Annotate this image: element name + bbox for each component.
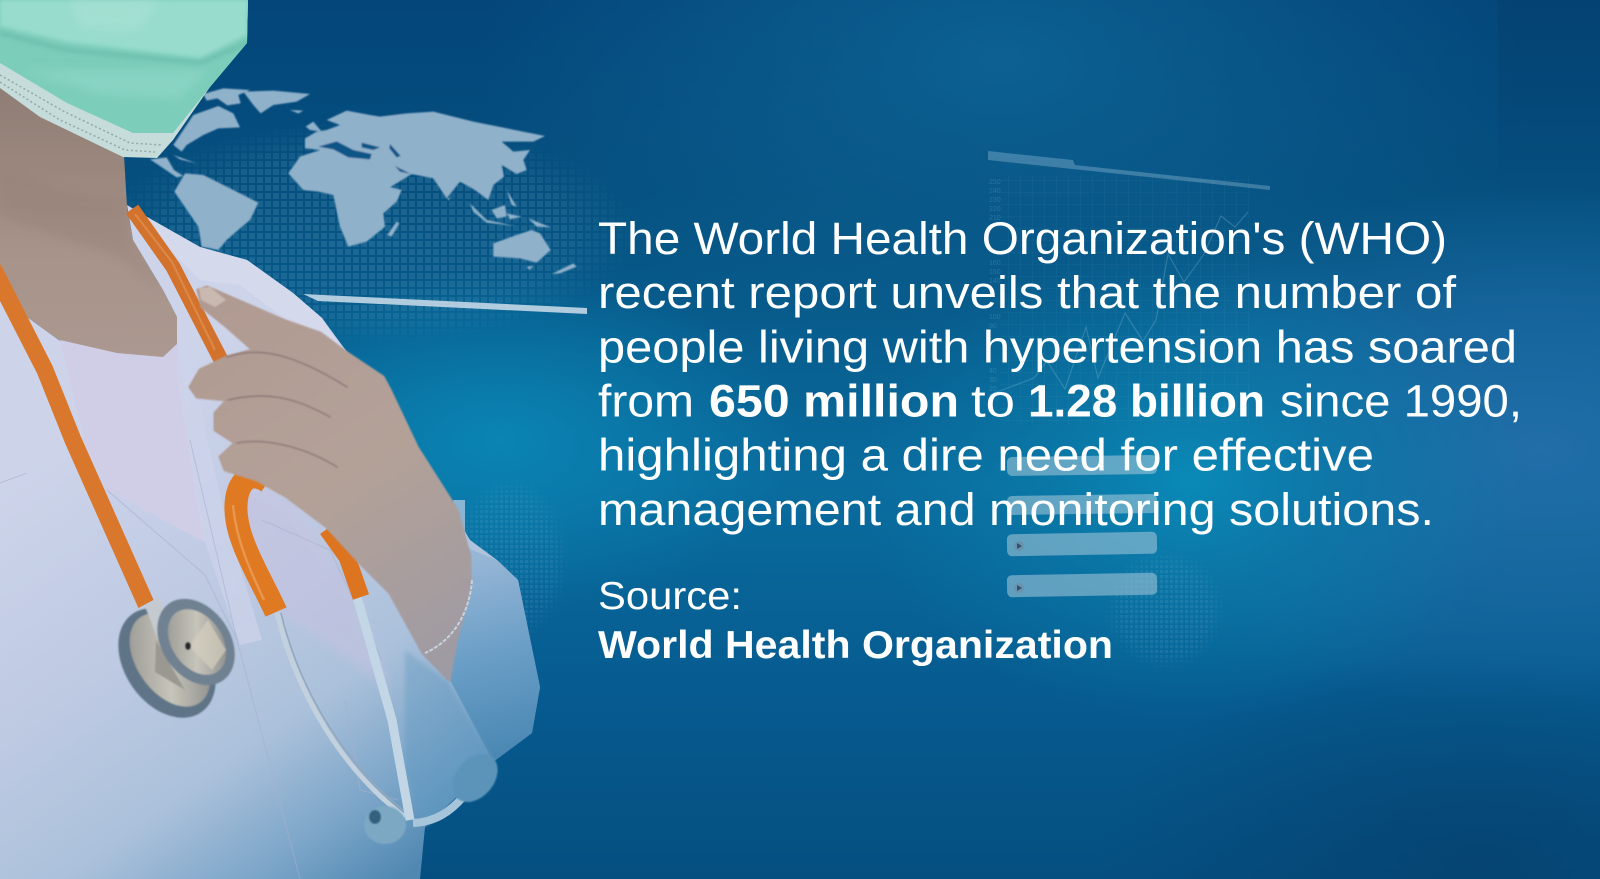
lab coat [0, 205, 540, 879]
stethoscope short tube [327, 529, 361, 597]
main paragraph: management and monitoring solutions. [598, 484, 1434, 535]
pink shading behind tube [226, 470, 390, 690]
main paragraph [598, 213, 1522, 535]
dot texture behind sleeve [465, 490, 561, 626]
list bars [1007, 455, 1157, 597]
chart axis labels: 100 [989, 314, 1001, 321]
metal tubes [277, 597, 463, 823]
chart axis labels: 160 [989, 260, 1001, 267]
surgical mask [0, 0, 248, 158]
chart panel [988, 151, 1270, 680]
chart axis labels: 30 [989, 377, 997, 384]
neck skin [0, 85, 177, 358]
coat lapel strip [176, 345, 262, 645]
chart grid [1000, 175, 1250, 425]
blue pocket block behind wrist [453, 500, 465, 542]
main paragraph: 650 million [709, 376, 959, 426]
chart axis labels: 240 [989, 188, 1001, 195]
chart axis labels: 140 [989, 278, 1001, 285]
main paragraph: 1.28 billion [1028, 376, 1265, 426]
cuff [405, 650, 493, 827]
chart header bar [988, 151, 1270, 190]
main paragraph: The World Health Organization's (WHO) [598, 213, 1447, 264]
main paragraph: recent report unveils that the number of [598, 267, 1457, 318]
hand [190, 287, 470, 680]
coat sleeve [450, 548, 540, 762]
chart axis labels: 90 [989, 323, 997, 330]
main paragraph: highlighting a dire need for effective [598, 430, 1374, 480]
chart axis labels: 220 [989, 206, 1001, 213]
faint dotted map [1112, 558, 1218, 662]
doctor photo [0, 0, 540, 879]
upper right collar highlight [140, 213, 345, 352]
earpieces [364, 745, 507, 844]
white horizon line [303, 294, 587, 314]
coat fold lines [0, 440, 398, 879]
chart axis labels: 20 [989, 386, 997, 393]
world map [150, 88, 577, 274]
chest piece [98, 584, 251, 736]
source [598, 575, 1113, 667]
chart axis labels: 250 [989, 179, 1001, 186]
stethoscope left tube [0, 264, 154, 608]
main paragraph: to [971, 376, 1015, 426]
continents [150, 88, 577, 274]
source: World Health Organization [598, 624, 1113, 667]
chart axis labels: 230 [989, 197, 1001, 204]
main paragraph: from [598, 376, 694, 426]
stethoscope upper right tube [132, 209, 240, 400]
chart line [989, 212, 1248, 395]
neck shadow [0, 170, 160, 290]
chart axis labels [989, 179, 1001, 393]
chart axis labels: 40 [989, 368, 997, 375]
undershirt [60, 340, 206, 543]
stethoscope U-tube [236, 477, 276, 612]
main paragraph: since 1990, [1280, 376, 1522, 426]
main paragraph: people living with hypertension has soared [598, 322, 1517, 372]
bracelet [425, 580, 472, 653]
dotted map grid [145, 140, 602, 327]
chart axis labels: 150 [989, 269, 1001, 276]
chart axis labels: 210 [989, 215, 1001, 222]
inland seas [318, 141, 411, 174]
source: Source: [598, 575, 742, 618]
